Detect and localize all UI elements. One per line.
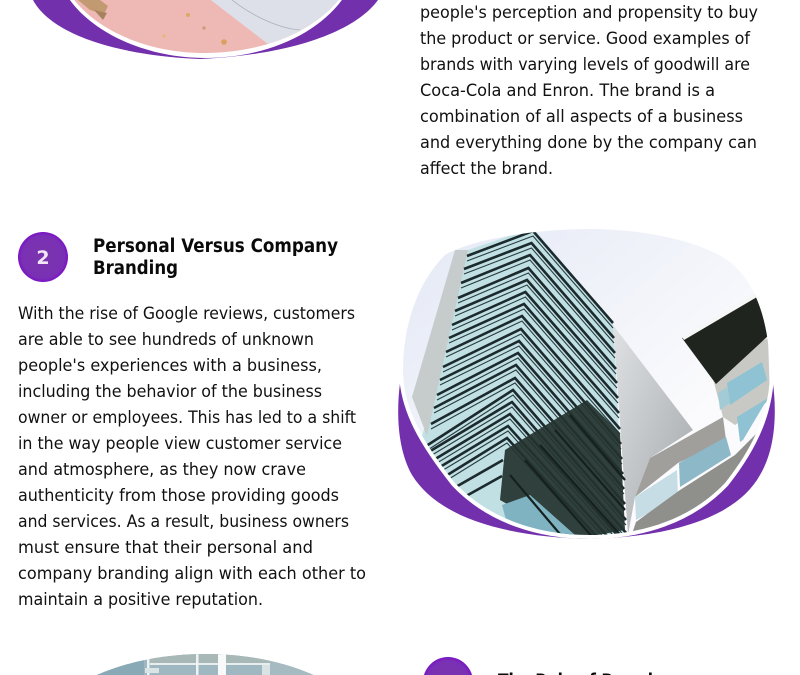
heading: Personal Versus Company Branding: Personal Versus Company: [93, 236, 338, 257]
text block: personal versus company branding paragraph: people's experiences with a business,: [18, 356, 322, 375]
number badge 3: [423, 657, 473, 675]
heading: Personal Versus Company Branding: [93, 236, 338, 279]
number badge 2: [18, 232, 68, 282]
text block: personal versus company branding paragraph: are able to see hundreds of unknown: [18, 330, 314, 349]
dark canopy: [682, 295, 768, 384]
photo 3: glass atrium, top of image: [96, 654, 314, 675]
text block: brand goodwill paragraph: combination of all aspects of a business: [420, 107, 743, 126]
right building upper: [710, 338, 770, 425]
text block: brand goodwill paragraph: Coca-Cola and Enron. The brand is a: [420, 81, 715, 100]
photo 2: office tower with purple crescent: [398, 229, 775, 539]
tower glass: [408, 228, 625, 540]
text block: personal versus company branding paragraph: in the way people view customer service: [18, 434, 342, 453]
heading: Personal Versus Company Branding: Branding: [93, 258, 178, 279]
text block: personal versus company branding paragraph: With the rise of Google reviews, customers: [18, 304, 355, 323]
text block: brand goodwill paragraph: the product or service. Good examples of: [420, 29, 751, 48]
text block: personal versus company branding paragraph: must ensure that their personal and: [18, 538, 313, 557]
text block: brand goodwill paragraph: [420, 3, 758, 178]
text block: personal versus company branding paragraph: and services. As a result, business owners: [18, 512, 349, 531]
text block: personal versus company branding paragraph: authenticity from those providing goods: [18, 486, 339, 505]
text block: personal versus company branding paragraph: and atmosphere, as they now crave: [18, 460, 306, 479]
text block: brand goodwill paragraph: brands with varying levels of goodwill are: [420, 55, 750, 74]
text block: personal versus company branding paragraph: owner or employees. This has led to a shift: [18, 408, 357, 427]
text block: personal versus company branding paragraph: maintain a positive reputation.: [18, 590, 263, 609]
text block: personal versus company branding paragraph: including the behavior of the business: [18, 382, 322, 401]
window stripes: [427, 232, 628, 535]
right building lower band: [635, 417, 726, 497]
dark reflection: [500, 400, 625, 540]
text block: brand goodwill paragraph: and everything done by the company can: [420, 133, 757, 152]
photo 1 with purple crescent: [33, 0, 378, 64]
text block: brand goodwill paragraph: affect the brand.: [420, 159, 553, 178]
concrete column: [412, 250, 468, 436]
text block: brand goodwill paragraph: people's perception and propensity to buy: [420, 3, 758, 22]
text block: personal versus company branding paragraph: [18, 304, 366, 609]
number badge 2: 2: [36, 247, 50, 269]
side wall: [613, 325, 693, 535]
text block: personal versus company branding paragraph: company branding align with each other to: [18, 564, 366, 583]
